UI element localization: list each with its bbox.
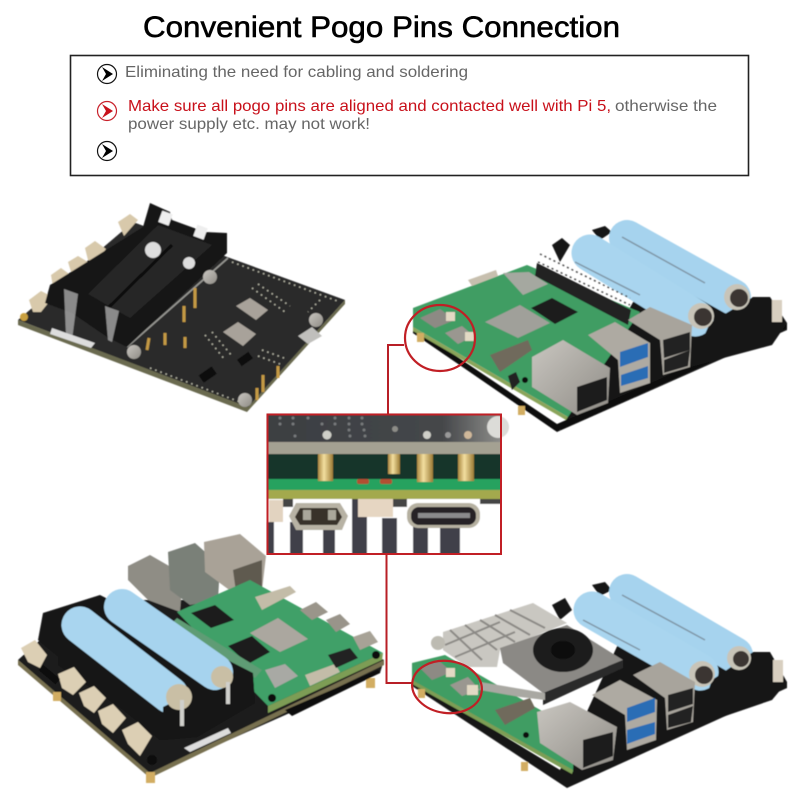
connectors row: [29, 214, 138, 312]
holder: [690, 297, 787, 367]
icon: black arrow bullet 1: [98, 64, 116, 84]
standoffs: [203, 270, 217, 284]
panel: notes box: [70, 56, 748, 176]
gold standoffs: [418, 689, 425, 698]
gold feet: [53, 692, 61, 701]
text: power supply note: power supply etc. may not work!: [128, 116, 370, 133]
USB-C port: [407, 503, 480, 528]
heatsink base: [480, 682, 545, 700]
panel: pogo pin close-up: [267, 414, 509, 554]
circled power and USB connectors: [420, 309, 455, 328]
USB-C: [298, 327, 322, 344]
small connector: [508, 372, 520, 390]
USB ports: [628, 307, 692, 375]
callout connector: top: [388, 345, 404, 414]
icon: black arrow bullet 3: [98, 142, 116, 160]
tan blocks: [269, 500, 283, 522]
title: Convenient Pogo Pins Connection: [143, 11, 620, 44]
gold pins: [318, 454, 333, 481]
photo: assembled board with heatsink and fan, bottom right: [412, 582, 787, 788]
holder rear: [38, 595, 255, 740]
micro HDMI port: [289, 503, 348, 530]
text: warning continuation: otherwise the: [615, 98, 717, 115]
heatsink: [443, 603, 567, 667]
ethernet port: [537, 702, 617, 770]
GPIO header: [535, 263, 631, 325]
photo: assembled board with batteries, bottom left: [18, 534, 384, 783]
text: red warning: Make sure all pogo pins are aligned and contacted well with Pi 5,: [128, 98, 611, 115]
chips: [503, 272, 548, 295]
gold pins: [147, 288, 278, 400]
battery holder front: [163, 675, 255, 740]
fan housing: [500, 625, 623, 693]
Pi green board: [177, 580, 383, 706]
callout circle: bottom pogo pins: [409, 656, 485, 718]
photo: assembled board with Raspberry Pi, top right: [413, 226, 787, 432]
battery holder: [45, 203, 227, 347]
connectors: [21, 640, 152, 756]
inductors: [236, 298, 268, 320]
gold standoffs: [417, 333, 424, 342]
photo: expansion board top view: [18, 203, 345, 412]
text: eliminating cabling: Eliminating the need for cabling and soldering: [125, 64, 468, 81]
board via dots: [322, 416, 509, 440]
ethernet port: [532, 340, 610, 415]
holder rear tips: [552, 238, 570, 262]
holder rear tips: [552, 598, 572, 620]
batteries: [590, 238, 733, 318]
callout circle: top pogo pins: [405, 305, 475, 371]
holder: [696, 652, 787, 726]
batteries: [80, 607, 215, 695]
icon: red arrow bullet: [98, 102, 116, 120]
silkscreen battery icon: [50, 328, 95, 348]
callout connector: bottom: [386, 554, 412, 683]
lower stripes: [267, 499, 460, 554]
USB ports: [633, 662, 695, 730]
silkscreen battery: [184, 728, 231, 752]
batteries: [592, 592, 735, 672]
Pi green board: [413, 265, 640, 417]
GPIO header: [170, 618, 262, 678]
Pi chips: [191, 605, 234, 628]
ports behind: [128, 555, 183, 612]
power connectors: [420, 660, 452, 680]
pin dots: [150, 262, 340, 402]
